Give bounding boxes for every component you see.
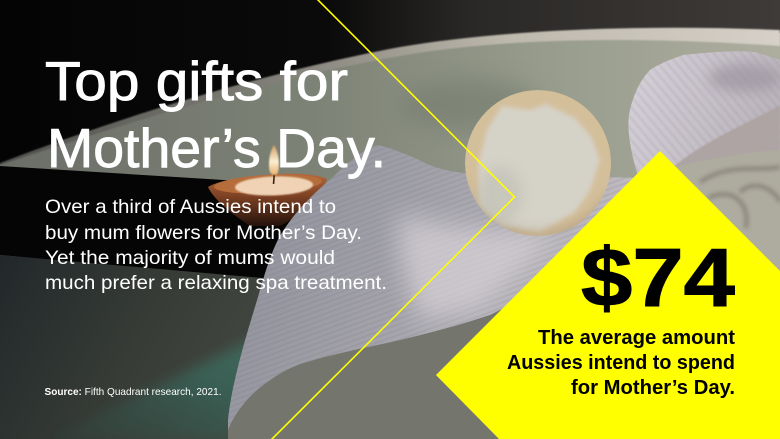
source note: Source: Fifth Quadrant research, 2021. (44, 386, 222, 398)
wick (274, 172, 275, 184)
bath rim highlight (0, 28, 780, 165)
big number: $74 (581, 231, 735, 324)
callout caption: The average amount (538, 327, 735, 349)
title: Mother’s Day. (47, 117, 386, 179)
rolled towel (628, 51, 780, 290)
title (45, 50, 386, 179)
callout caption: Aussies intend to spend (507, 352, 735, 374)
dish inner rim (214, 172, 322, 196)
green patch in water (400, 80, 540, 130)
yellow diamond callout (436, 151, 780, 439)
body text: buy mum flowers for Mother’s Day. (45, 222, 362, 244)
bath bomb ball (462, 90, 612, 240)
flame (269, 145, 279, 175)
towel roll core (672, 150, 780, 280)
left shading (480, 170, 520, 218)
callout caption (507, 327, 735, 399)
dish body (208, 174, 327, 226)
body text: Yet the majority of mums would (45, 247, 335, 269)
bath water (0, 31, 780, 300)
left towel (228, 145, 640, 439)
towel roll fold band (672, 105, 780, 175)
diamond shape (436, 151, 780, 439)
body text: Over a third of Aussies intend to (45, 196, 336, 218)
teal reflection (50, 338, 255, 439)
body text (45, 196, 387, 294)
candle in dish (208, 145, 327, 226)
callout caption: for Mother’s Day. (571, 377, 735, 399)
body text: much prefer a relaxing spa treatment. (45, 272, 387, 294)
lower shading (476, 198, 601, 236)
towel roll spiral (700, 167, 780, 228)
white patch (478, 104, 600, 232)
bright fold near ball (399, 215, 560, 320)
dark shelf (0, 166, 340, 285)
lower foreground (0, 255, 320, 439)
towel roll shadow (709, 64, 780, 92)
towel underside in shadow (228, 300, 520, 439)
title: Top gifts for (45, 50, 348, 112)
yellow chevron line (271, 0, 514, 439)
wax (235, 175, 313, 197)
